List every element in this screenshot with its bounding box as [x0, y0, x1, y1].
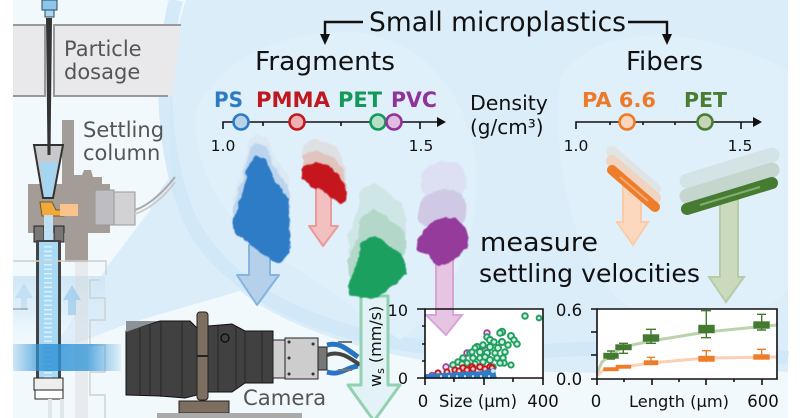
fiber polymer labels: PA 6.6 [582, 88, 656, 112]
fiber polymer labels [582, 88, 727, 112]
PS particle and arrow [236, 137, 287, 305]
fibers heading: Fibers [626, 46, 703, 76]
title: Small microplastics [369, 7, 626, 38]
density label [470, 91, 548, 139]
scatter plot: settling velocity versus size: 10 [388, 301, 408, 320]
measure settling velocities text: settling velocities [479, 259, 700, 288]
fiber density axis [564, 114, 762, 155]
PMMA particle and arrow [305, 141, 344, 246]
fragment polymer labels: PS [214, 88, 243, 112]
upper illumination band [13, 276, 105, 340]
PA 6.6 fiber and arrow [612, 152, 655, 245]
fragment polymer labels [214, 88, 437, 112]
scatter plot: settling velocity versus size: Size (µm) [439, 392, 517, 411]
line plot: settling velocity versus length: 0.0 [556, 370, 582, 389]
settling column apparatus [13, 120, 175, 418]
scatter plot: settling velocity versus size: 0 [418, 392, 428, 411]
scatter plot: settling velocity versus size: 0 [398, 369, 408, 388]
line plot: settling velocity versus length: Length (µm) [629, 392, 729, 411]
camera [126, 312, 360, 418]
PET fragment particle and arrow [348, 186, 404, 418]
measure settling velocities text [479, 228, 700, 288]
PET fiber and arrow [687, 155, 772, 302]
y axis title: (mm/s) [366, 306, 385, 368]
density label: Density [470, 91, 548, 115]
scatter plot: settling velocity versus size [388, 301, 559, 411]
y axis title: w [366, 374, 385, 387]
PVC particle and arrow [420, 164, 465, 335]
PMMA points [435, 364, 495, 376]
y axis title: s [374, 368, 387, 374]
PVC points [430, 330, 490, 377]
PA fit curve [597, 357, 777, 376]
orange fitting [40, 202, 64, 216]
measure settling velocities text: measure [480, 228, 598, 258]
needle and syringe [42, 0, 57, 155]
housing [28, 120, 110, 262]
particle dosage panel [13, 25, 190, 96]
fragment polymer labels: PMMA [256, 88, 331, 112]
fiber polymer labels: PET [684, 88, 727, 112]
camera label: Camera [243, 385, 326, 410]
fiber density axis: 1.0 [564, 137, 588, 155]
fiber density axis: 1.5 [728, 137, 752, 155]
PA box plots [604, 349, 769, 370]
density label: (g/cm³) [470, 115, 544, 139]
gray frame [13, 261, 106, 418]
arrow to fibers [628, 22, 672, 45]
column tube [34, 226, 44, 242]
fragment density axis [211, 114, 446, 155]
line plot: settling velocity versus length: 0 [591, 392, 601, 411]
fragment density axis: 1.5 [409, 137, 433, 155]
PET box plots [604, 311, 769, 359]
line plot: settling velocity versus length: 0.6 [556, 301, 582, 320]
scatter plot: settling velocity versus size: 400 [527, 392, 559, 411]
flow arrows [15, 283, 33, 310]
base [34, 378, 63, 390]
fragment density axis: 1.0 [211, 137, 235, 155]
line plot: settling velocity versus length: 600 [747, 392, 779, 411]
line plot: settling velocity versus length [556, 301, 779, 411]
particle dosage panel: Particle [64, 37, 142, 61]
fragments heading: Fragments [255, 47, 395, 77]
settling column label: column [83, 141, 160, 165]
funnel [34, 145, 63, 198]
PET points [450, 313, 541, 370]
fragment polymer labels: PET [338, 88, 383, 112]
PS points [425, 369, 496, 378]
PVC arrow tip over chart [426, 309, 462, 335]
PET fit curve [597, 325, 777, 373]
settling column label: Settling [83, 118, 164, 142]
arrow to fragments [320, 22, 363, 45]
particle dosage panel: dosage [64, 60, 140, 84]
fragment polymer labels: PVC [391, 88, 437, 112]
imaging light sheet [13, 344, 121, 371]
settling column label [83, 118, 164, 165]
